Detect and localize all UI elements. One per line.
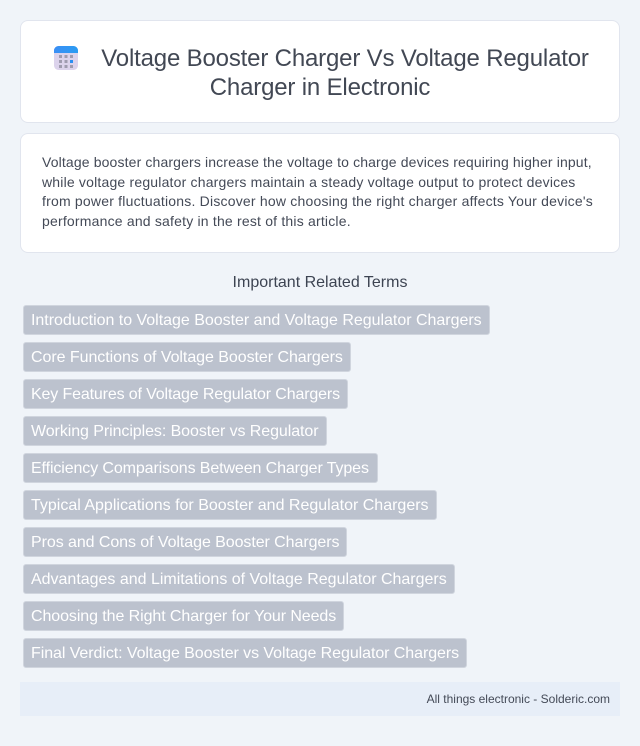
term 5: Efficiency Comparisons Between Charger Types — [31, 460, 369, 477]
term 2 — [23, 342, 351, 372]
intro text panel: while voltage regulator chargers maintain a steady voltage output to protect devices — [42, 174, 575, 190]
term 1: Introduction to Voltage Booster and Voltage Regulator Chargers — [31, 312, 482, 329]
term 10: Final Verdict: Voltage Booster vs Voltage Regulator Chargers — [31, 645, 459, 662]
section heading: Important Related Terms — [233, 274, 407, 291]
term 8: Advantages and Limitations of Voltage Regulator Chargers — [31, 571, 447, 588]
header panel — [20, 20, 620, 123]
footer — [20, 682, 620, 716]
term 4: Working Principles: Booster vs Regulator — [31, 423, 318, 440]
icon: calendar — [54, 46, 78, 70]
term 2: Core Functions of Voltage Booster Chargers — [31, 349, 343, 366]
intro text panel: from power fluctuations. Discover how choosing the right charger affects Your device's — [42, 193, 593, 209]
term 5 — [23, 453, 378, 483]
title: Voltage Booster Charger Vs Voltage Regulator — [101, 45, 589, 72]
term 7 — [23, 527, 347, 557]
term 10 — [23, 638, 467, 668]
term 4 — [23, 416, 327, 446]
term 8 — [23, 564, 455, 594]
term 3 — [23, 379, 348, 409]
footer: All things electronic - Solderic.com — [427, 692, 610, 706]
title — [101, 45, 589, 101]
term 3: Key Features of Voltage Regulator Chargers — [31, 386, 340, 403]
title: Charger in Electronic — [210, 74, 430, 101]
term 9: Choosing the Right Charger for Your Needs — [31, 608, 336, 625]
term 6: Typical Applications for Booster and Regulator Chargers — [31, 497, 429, 514]
term list — [23, 305, 490, 668]
intro text panel — [20, 133, 620, 253]
intro text panel: Voltage booster chargers increase the voltage to charge devices requiring higher input, — [42, 154, 592, 170]
term 1 — [23, 305, 490, 335]
term 6 — [23, 490, 437, 520]
intro text panel: performance and safety in the rest of this article. — [42, 213, 351, 229]
term 9 — [23, 601, 344, 631]
term 7: Pros and Cons of Voltage Booster Chargers — [31, 534, 339, 551]
